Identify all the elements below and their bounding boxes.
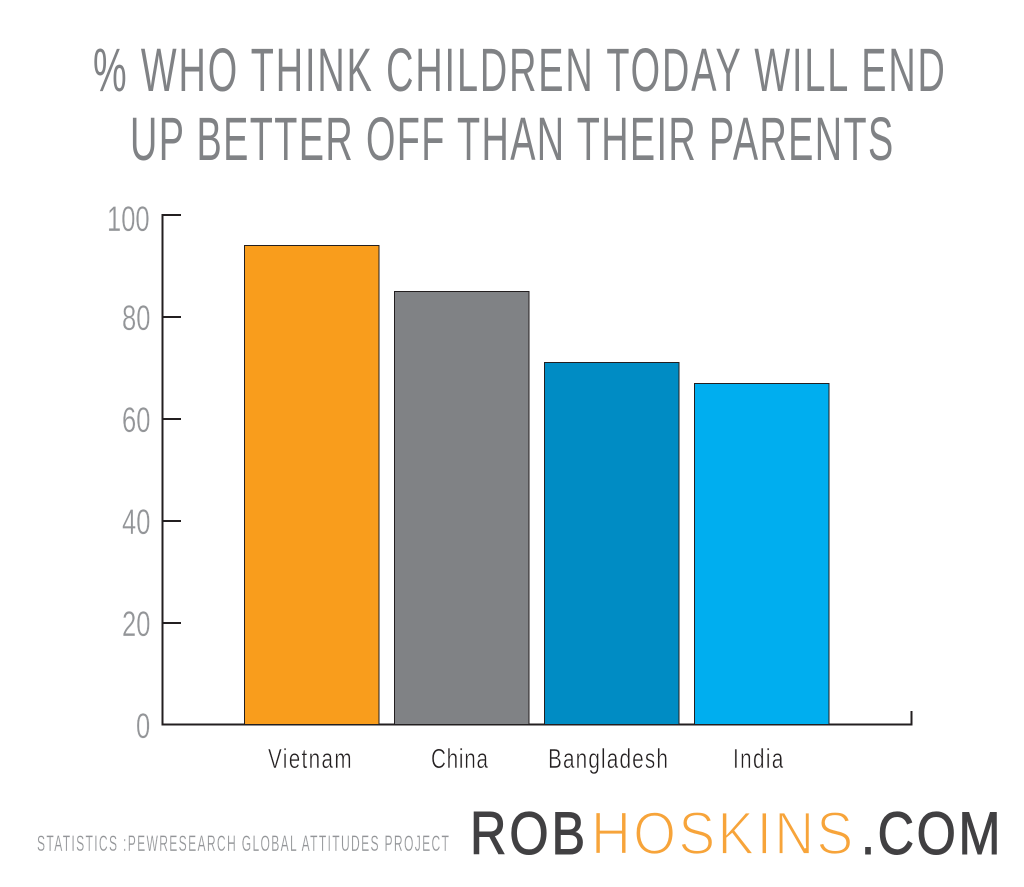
- title: % WHO THINK CHILDREN TODAY WILL END: [93, 36, 945, 104]
- title: [93, 36, 945, 173]
- brand logo: .COM: [861, 800, 1000, 867]
- category labels: [268, 744, 784, 775]
- category labels: India: [733, 744, 784, 775]
- y axis labels: 80: [122, 299, 150, 338]
- y axis labels: 0: [136, 707, 150, 746]
- category labels: China: [431, 744, 488, 775]
- bar: India: [694, 384, 829, 724]
- brand logo: HOSKINS: [591, 801, 853, 868]
- category labels: Vietnam: [268, 744, 352, 775]
- y axis labels: 20: [122, 605, 150, 644]
- bar: Bangladesh: [544, 362, 679, 724]
- y axis labels: 100: [107, 200, 150, 239]
- bar: China: [394, 292, 529, 724]
- bar: Vietnam: [244, 246, 379, 724]
- source note: STATISTICS :PEWRESEARCH GLOBAL ATTITUDES PROJECT: [37, 831, 449, 856]
- chart axes: [162, 215, 912, 724]
- y axis labels: [107, 200, 150, 746]
- title: UP BETTER OFF THAN THEIR PARENTS: [130, 105, 893, 173]
- brand logo: [470, 800, 1000, 868]
- y axis labels: 40: [122, 503, 150, 542]
- brand logo: ROB: [470, 800, 585, 867]
- category labels: Bangladesh: [548, 744, 668, 775]
- y axis labels: 60: [122, 401, 150, 440]
- bar chart: [244, 246, 829, 724]
